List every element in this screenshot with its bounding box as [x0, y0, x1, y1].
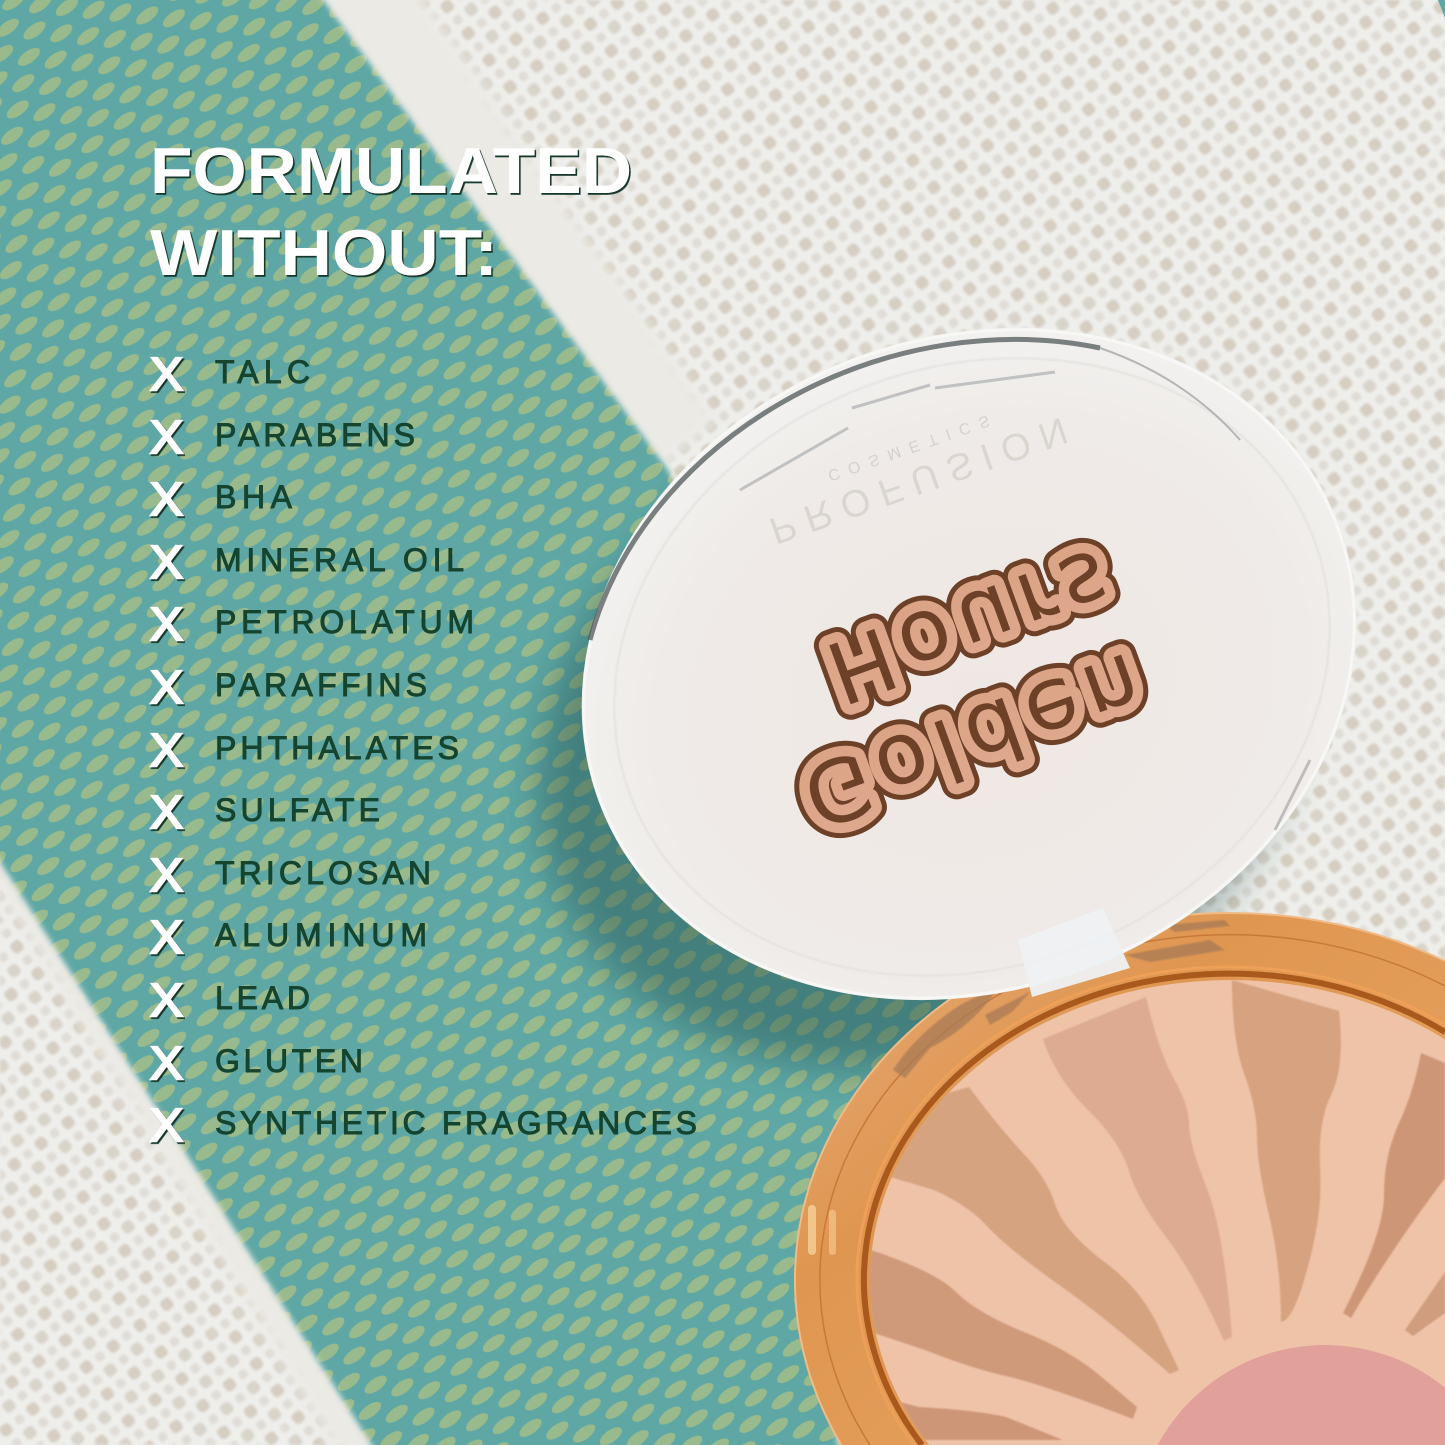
brand name mirrored: PROFUSION	[764, 409, 1073, 551]
x marks: X	[150, 786, 183, 838]
ring reflections	[893, 920, 1230, 1078]
ingredient list: TALC	[215, 354, 310, 390]
pink sun	[1158, 1345, 1445, 1445]
x marks: X	[150, 1099, 183, 1151]
ingredient list: PETROLATUM	[215, 604, 474, 640]
ingredient list: TRICLOSAN	[215, 855, 431, 891]
edge reflection	[1100, 348, 1240, 440]
dark top reflection	[590, 339, 1100, 640]
ray top pink	[1043, 997, 1232, 1341]
ray top	[1232, 980, 1341, 1322]
ingredient list: SYNTHETIC FRAGRANCES	[215, 1105, 697, 1141]
fabric plain bands along stripe	[0, 0, 712, 1445]
teal corner top right	[1438, 0, 1445, 18]
ingredient list: GLUTEN	[215, 1043, 363, 1079]
x marks: X	[150, 911, 183, 963]
gold ring	[795, 913, 1445, 1445]
lid inner ring	[525, 258, 1419, 1076]
logo line 2 outline: Hours	[814, 529, 1123, 722]
mirrored logo	[790, 529, 1155, 847]
ingredient list: PHTHALATES	[215, 730, 459, 766]
ray far right	[1405, 1272, 1445, 1336]
ring highlight	[808, 1205, 836, 1255]
x marks: X	[150, 1037, 183, 1089]
ray left	[880, 1087, 1179, 1374]
x marks: X	[150, 348, 183, 400]
lid notch top	[740, 372, 1055, 490]
ray right	[1343, 1053, 1445, 1318]
x marks: X	[150, 598, 183, 650]
ingredient list: SULFATE	[215, 792, 380, 828]
heading line 1: FORMULATED	[150, 134, 632, 207]
ingredient list: MINERAL OIL	[215, 542, 464, 578]
x marks: X	[150, 411, 183, 463]
hinge	[1018, 908, 1130, 997]
x marks	[150, 348, 183, 1151]
ingredient list: BHA	[215, 479, 293, 515]
lid body	[484, 219, 1445, 1109]
compact pan	[795, 913, 1445, 1445]
ingredient list: PARAFFINS	[215, 667, 427, 703]
powder	[850, 975, 1445, 1445]
ingredient list	[215, 354, 697, 1141]
brand sub mirrored: COSMETICS	[825, 411, 992, 484]
ingredient list: LEAD	[215, 980, 310, 1016]
logo line 2: Hours	[814, 529, 1123, 722]
x marks: X	[150, 473, 183, 525]
x marks: X	[150, 536, 183, 588]
logo line 1: Golden	[790, 632, 1155, 847]
lid rim	[487, 222, 1445, 1106]
lid notch right	[1275, 760, 1310, 830]
x marks: X	[150, 849, 183, 901]
heading	[150, 134, 632, 289]
lid shadow	[444, 315, 1386, 1175]
ray lower left	[850, 1245, 1137, 1419]
x marks: X	[150, 974, 183, 1026]
heading line 2: WITHOUT:	[150, 216, 498, 289]
clear lid	[484, 219, 1445, 1109]
logo line 1 outline: Golden	[790, 632, 1155, 847]
x marks: X	[150, 724, 183, 776]
ingredient list: PARABENS	[215, 417, 415, 453]
ingredient list: ALUMINUM	[215, 917, 427, 953]
teal dotted stripe	[0, 0, 948, 1445]
ray bottom	[900, 1402, 1063, 1440]
x marks: X	[150, 661, 183, 713]
